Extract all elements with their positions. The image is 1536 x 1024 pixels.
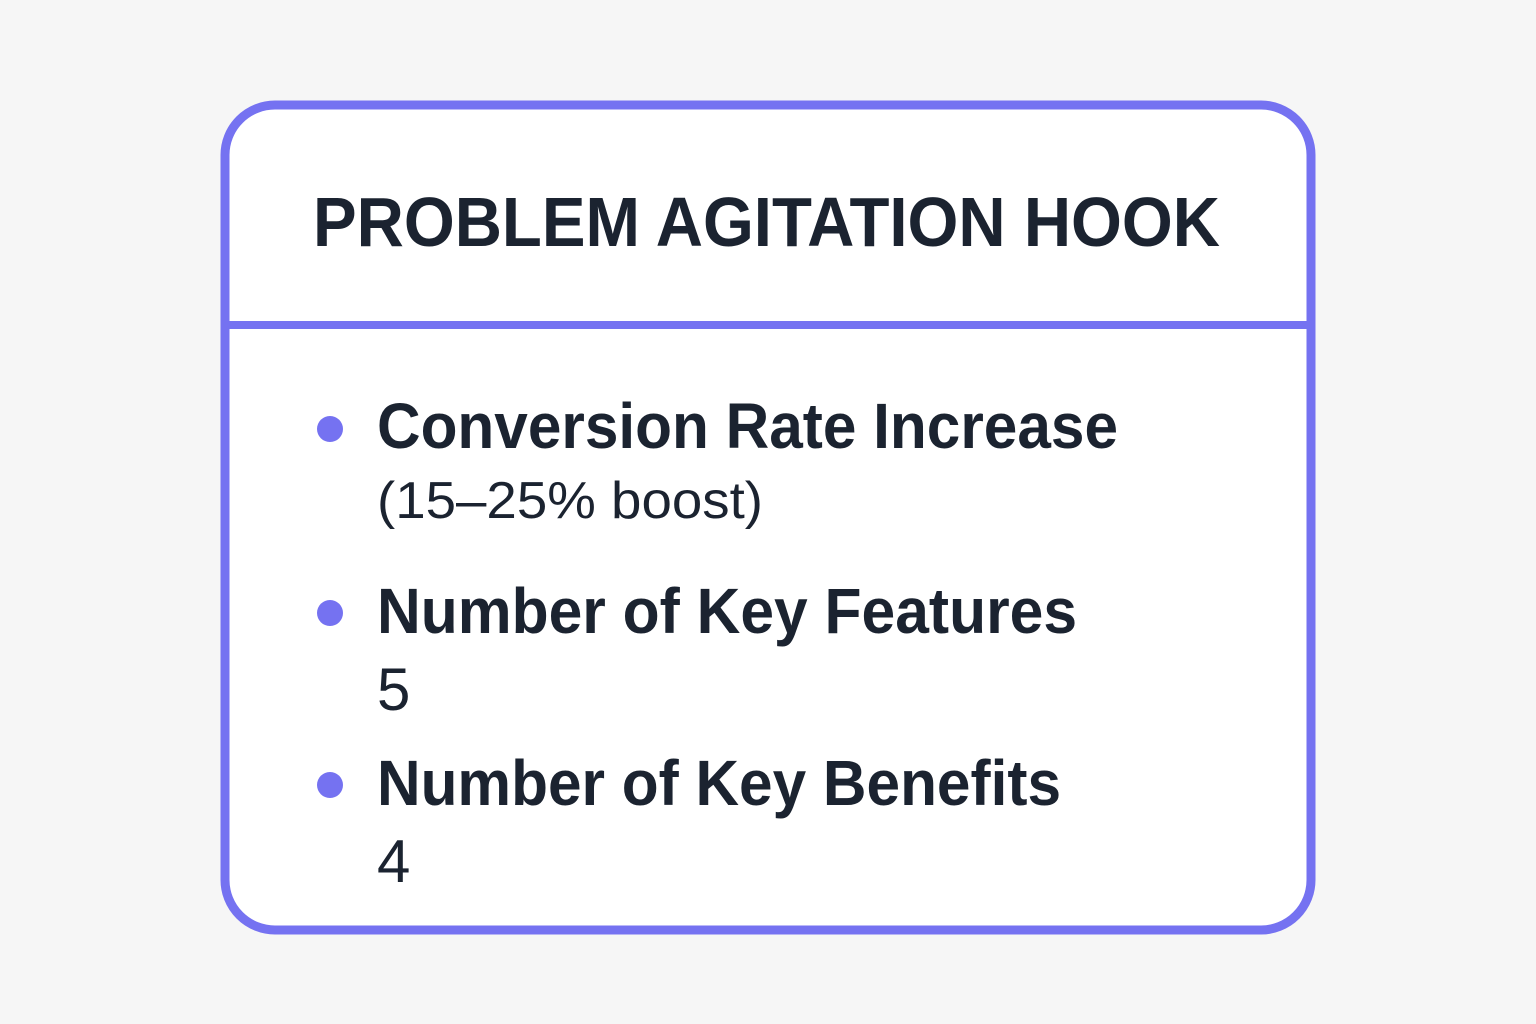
bullet: key features: Number of Key Features xyxy=(377,575,1077,647)
bullet: key features xyxy=(317,575,1077,723)
title: PROBLEM AGITATION HOOK xyxy=(313,183,1220,261)
bullet: key benefits: 4 xyxy=(377,828,410,895)
panel: card xyxy=(225,105,1311,930)
bullet: conversion rate xyxy=(317,390,1118,530)
bullet: key benefits xyxy=(317,747,1061,895)
bullet: key features: 5 xyxy=(377,656,410,723)
bullet: conversion rate: Conversion Rate Increase xyxy=(377,390,1118,462)
bullet: conversion rate: (15–25% boost) xyxy=(377,472,763,530)
bullet: key benefits: Number of Key Benefits xyxy=(377,747,1061,819)
